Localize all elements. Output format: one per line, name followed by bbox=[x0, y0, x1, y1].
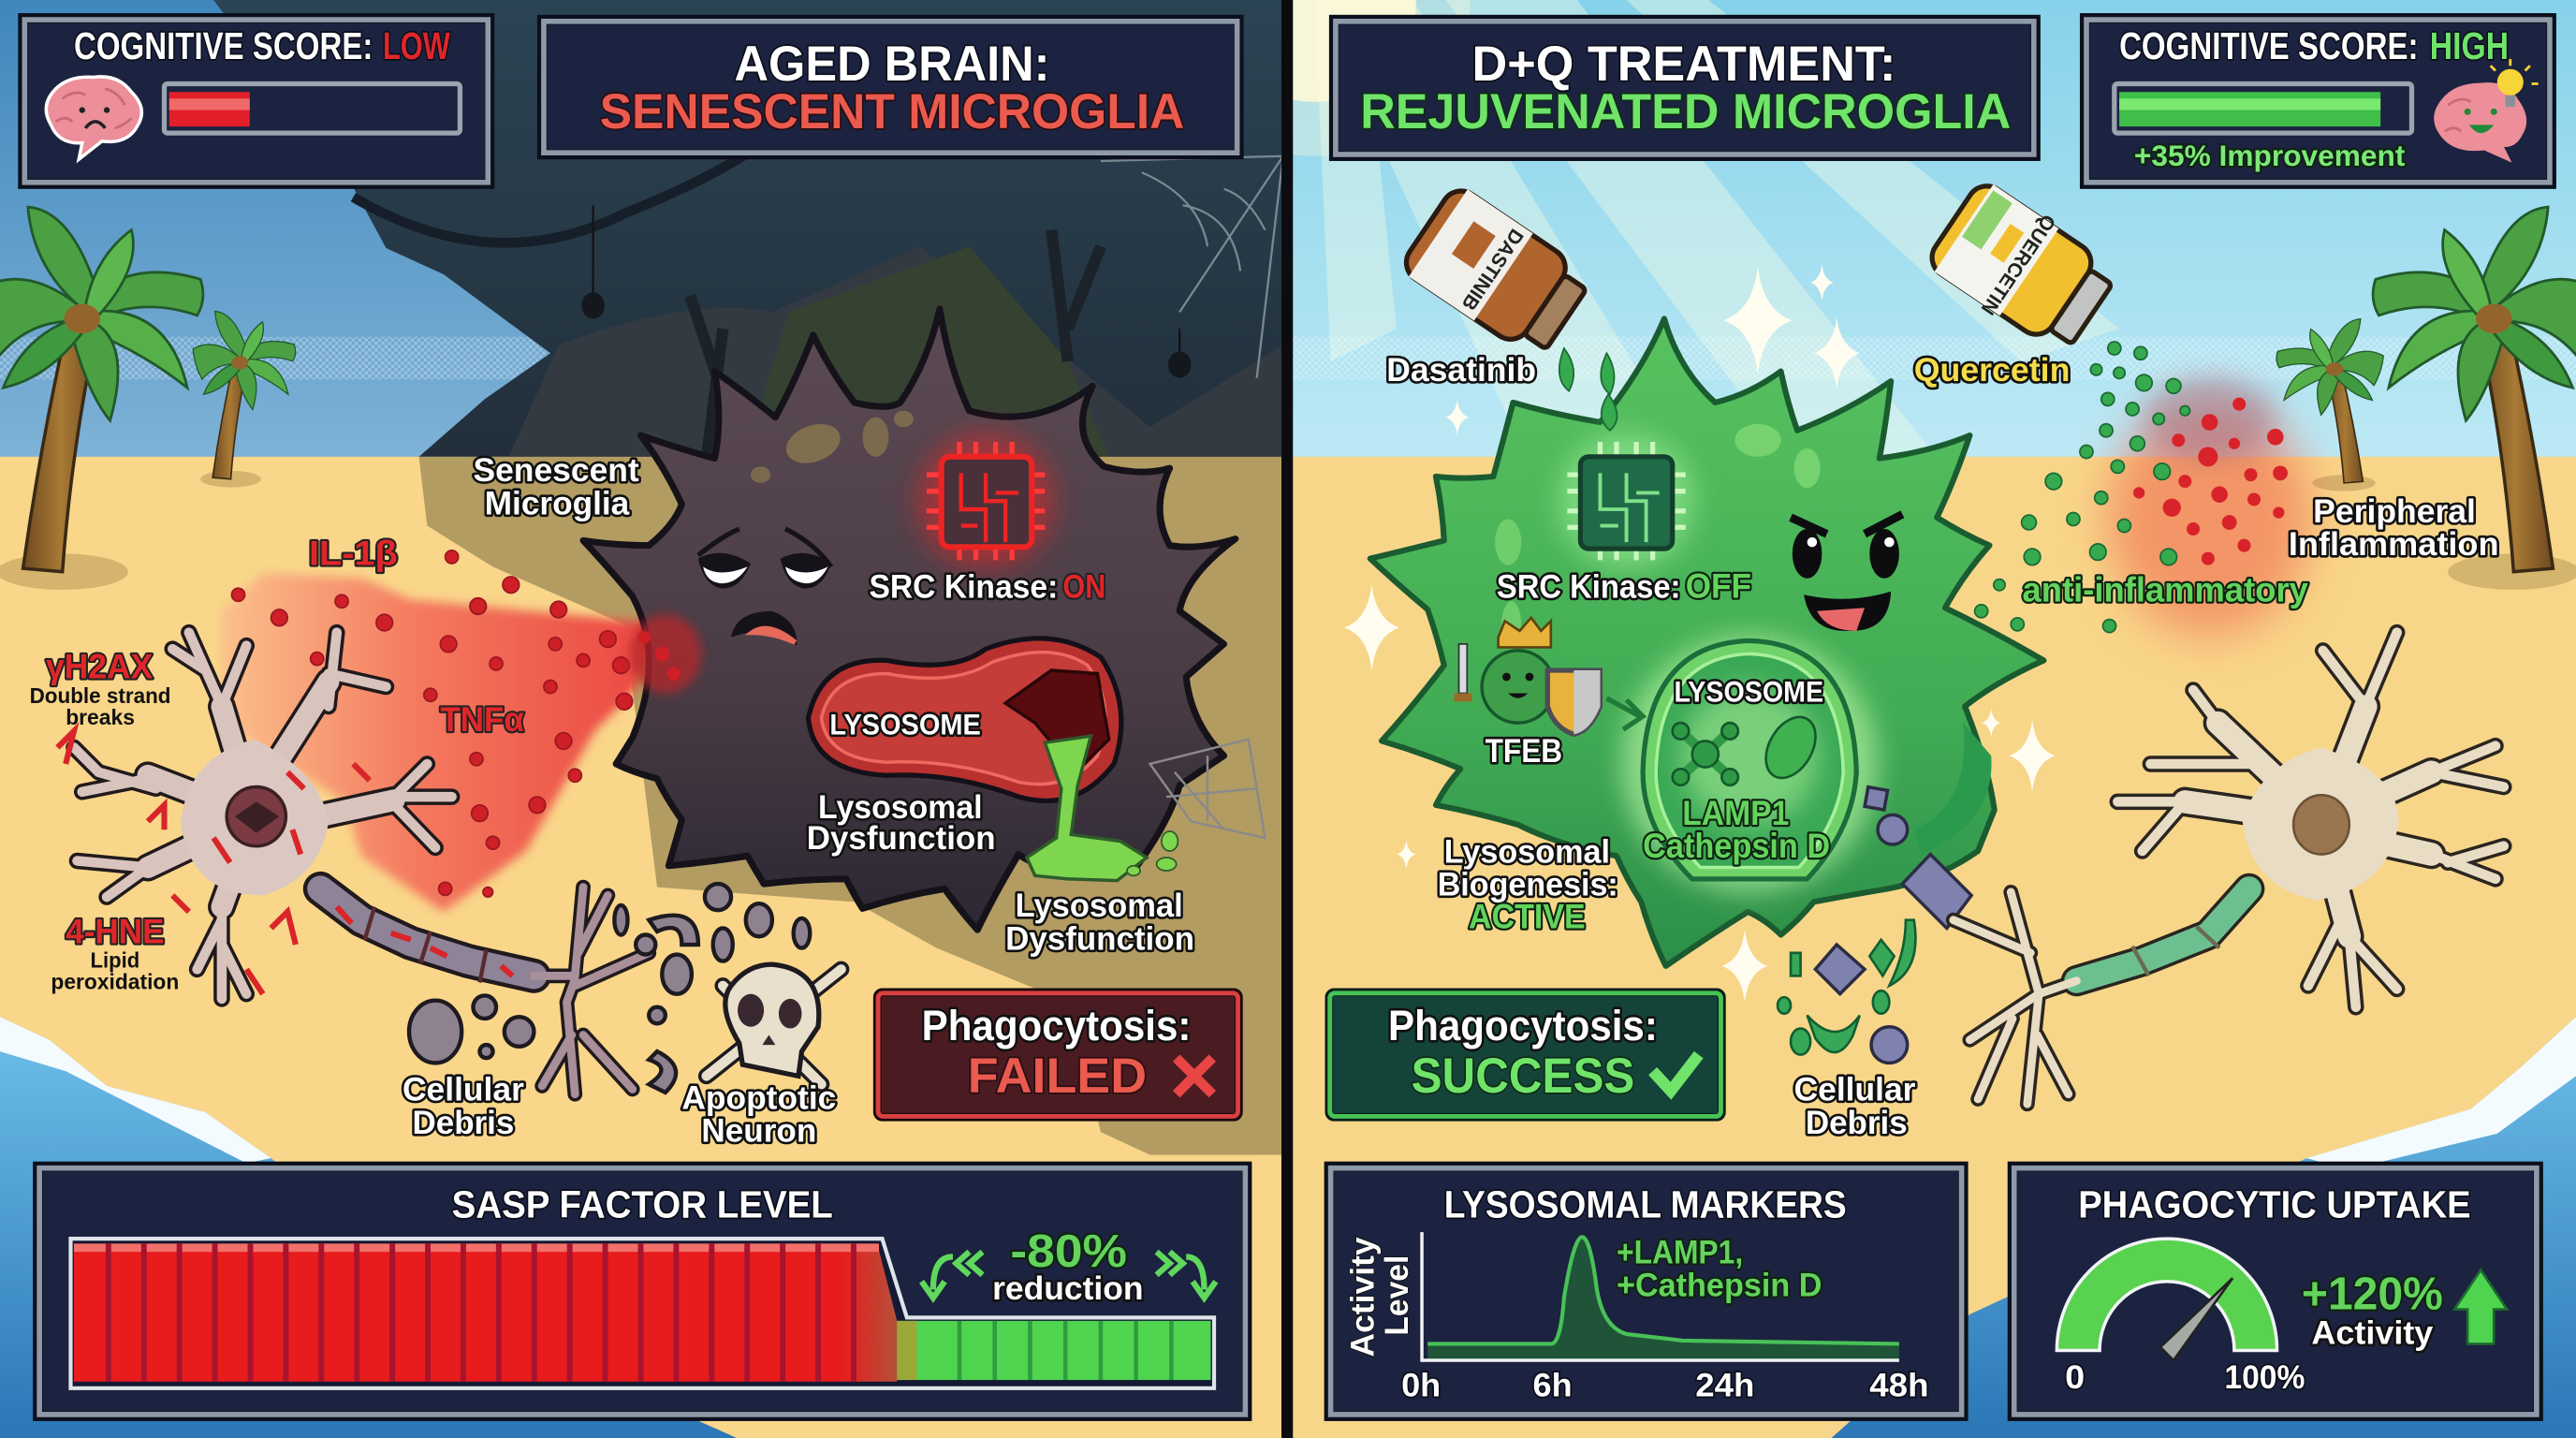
score bar high bbox=[2115, 83, 2411, 133]
label: apoptotic neuron: Apoptotic bbox=[681, 1080, 836, 1117]
palm tree big left bbox=[0, 207, 203, 590]
label: 4-HNE: Lipid bbox=[91, 948, 139, 973]
palm tree small left bbox=[193, 312, 296, 488]
glowing lysosome bbox=[1621, 636, 1878, 892]
improvement text: +35% Improvement bbox=[2134, 139, 2406, 172]
label: cellular debris left: Cellular bbox=[402, 1072, 524, 1108]
icon: red X bbox=[1177, 1058, 1212, 1094]
panel: phagocytosis failed: FAILED bbox=[968, 1049, 1147, 1104]
panel: lysosomal markers bbox=[1329, 1167, 1963, 1416]
panel: phagocytosis success: Phagocytosis: bbox=[1388, 1002, 1658, 1049]
title: D+Q treatment: REJUVENATED MICROGLIA bbox=[1360, 84, 2011, 139]
cave rock backdrop bbox=[213, 0, 1283, 457]
label: lysosomal dysfunction inner: Dysfunction bbox=[807, 820, 996, 857]
dasatinib bottle bbox=[1398, 182, 1617, 431]
right scene background bbox=[1158, 0, 2576, 1438]
label: 4-HNE: 4-HNE bbox=[66, 912, 165, 950]
sparkles bbox=[1344, 265, 2056, 1002]
label: lysosomal biogenesis active: Lysosomal bbox=[1444, 833, 1610, 870]
panel: phagocytosis failed: Phagocytosis: bbox=[922, 1002, 1191, 1049]
icon: sad brain bbox=[46, 77, 141, 159]
TFEB knight bbox=[1454, 618, 1643, 734]
gauge: 0 bbox=[2065, 1359, 2085, 1396]
heading: COGNITIVE SCORE: bbox=[2119, 24, 2419, 67]
line chart: Activity bbox=[1344, 1237, 1381, 1357]
line chart: 6h bbox=[1533, 1368, 1573, 1404]
label: TFEB: TFEB bbox=[1486, 733, 1562, 770]
label: lysosomal dysfunction outer: Lysosomal bbox=[1016, 888, 1183, 924]
label: LAMP1 and cathepsin D bbox=[1643, 794, 1830, 865]
panel: cognitive score low bbox=[23, 18, 490, 184]
uptake value: +120% bbox=[2302, 1269, 2443, 1320]
palm tree big right bbox=[2373, 207, 2576, 590]
uptake value bbox=[2302, 1269, 2443, 1351]
panel: SASP factor level: SASP FACTOR LEVEL bbox=[452, 1182, 833, 1225]
anti-inflammatory particles bbox=[1975, 342, 2190, 633]
panel: phagocytosis success bbox=[1329, 992, 1721, 1117]
label: LAMP1 and cathepsin D: LAMP1 bbox=[1682, 794, 1789, 832]
quercetin bottle bbox=[1921, 172, 2124, 362]
cellular debris left bbox=[409, 884, 810, 1093]
title: aged brain: SENESCENT MICROGLIA bbox=[600, 84, 1184, 139]
label: TNF alpha: TNFα bbox=[440, 700, 524, 739]
label: senescent microglia: Senescent bbox=[473, 452, 639, 489]
label: IL-1 beta: IL-1β bbox=[309, 535, 398, 573]
heading: HIGH bbox=[2430, 24, 2509, 67]
label: lysosome right: LYSOSOME bbox=[1674, 674, 1823, 708]
debris being cleared bbox=[1778, 723, 1992, 1063]
label: gamma H2AX bbox=[30, 648, 171, 729]
label: SRC kinase on: ON bbox=[1063, 569, 1105, 606]
label: lysosomal dysfunction inner: Lysosomal bbox=[818, 789, 983, 826]
peripheral inflammation cloud bbox=[2108, 378, 2311, 636]
label: anti-inflammatory: anti-inflammatory bbox=[2023, 570, 2308, 609]
green slime leak bbox=[1027, 736, 1178, 881]
line chart: Level bbox=[1379, 1255, 1415, 1336]
icon: happy brain with bulb bbox=[2433, 59, 2539, 164]
left labels bbox=[30, 452, 1194, 1150]
label: lysosomal dysfunction outer: Dysfunction bbox=[1005, 920, 1194, 957]
label: senescent microglia bbox=[473, 452, 639, 521]
healthy neuron bbox=[1954, 633, 2504, 1104]
reduction callout: -80% bbox=[1010, 1226, 1127, 1277]
title: D+Q treatment bbox=[1334, 20, 2036, 156]
palm tree small right bbox=[2276, 319, 2383, 492]
label: gamma H2AX: breaks bbox=[66, 705, 135, 729]
cobweb on cell bbox=[1150, 740, 1265, 838]
happy face bbox=[1791, 514, 1902, 631]
heading: LOW bbox=[383, 24, 451, 67]
label: LAMP1 and cathepsin D: Cathepsin D bbox=[1643, 827, 1830, 865]
gauge: 100% bbox=[2224, 1359, 2305, 1396]
water bbox=[0, 1017, 739, 1438]
panel: phagocytic uptake: PHAGOCYTIC UPTAKE bbox=[2078, 1182, 2471, 1225]
label: peripheral inflammation: Inflammation bbox=[2289, 526, 2499, 563]
line chart: +LAMP1, bbox=[1617, 1234, 1743, 1270]
label: lysosomal biogenesis active bbox=[1438, 833, 1618, 935]
line chart: +Cathepsin D bbox=[1617, 1268, 1822, 1304]
label: peripheral inflammation: Peripheral bbox=[2313, 493, 2476, 530]
label: 4-HNE bbox=[51, 912, 179, 993]
reduction callout: reduction bbox=[992, 1270, 1144, 1307]
label: SRC kinase off: OFF bbox=[1686, 567, 1751, 606]
line chart: 24h bbox=[1695, 1368, 1754, 1404]
line chart: 0h bbox=[1401, 1368, 1441, 1404]
sad face bbox=[698, 529, 831, 646]
label: cellular debris right: Debris bbox=[1806, 1105, 1908, 1141]
damaged lysosome bbox=[809, 638, 1121, 800]
center divider bbox=[1281, 0, 1293, 1438]
label: lysosomal biogenesis active: ACTIVE bbox=[1469, 897, 1586, 935]
damaged neuron bbox=[57, 633, 649, 1094]
label: peripheral inflammation bbox=[2289, 493, 2499, 563]
rejuvenated microglia cell bbox=[1370, 318, 2043, 966]
label: lysosomal dysfunction inner bbox=[807, 789, 996, 857]
label: quercetin: Quercetin bbox=[1914, 352, 2070, 389]
cytokine cloud bbox=[222, 550, 666, 912]
skull bbox=[707, 964, 842, 1084]
panel: phagocytosis success: SUCCESS bbox=[1412, 1049, 1634, 1104]
left scene background bbox=[0, 0, 1283, 1438]
label: apoptotic neuron bbox=[681, 1080, 836, 1150]
label: lysosomal dysfunction outer bbox=[1005, 888, 1194, 957]
SRC kinase chip active bbox=[916, 433, 1055, 570]
quercetin bottle: QUERCETIN bbox=[1977, 211, 2059, 318]
SRC kinase chip inactive bbox=[1558, 433, 1695, 570]
score bar low bbox=[165, 83, 460, 133]
gauge bbox=[2056, 1239, 2305, 1396]
label: senescent microglia: Microglia bbox=[485, 485, 630, 521]
reduction callout bbox=[922, 1226, 1216, 1307]
label: cellular debris left: Debris bbox=[413, 1105, 514, 1141]
senescent microglia cell bbox=[583, 309, 1265, 930]
label: gamma H2AX: Double strand bbox=[30, 683, 171, 708]
panel: lysosomal markers: LYSOSOMAL MARKERS bbox=[1444, 1182, 1847, 1225]
icon: check mark bbox=[1653, 1055, 1699, 1091]
title: aged brain: AGED BRAIN: bbox=[735, 37, 1050, 92]
label: cellular debris right: Cellular bbox=[1794, 1072, 1916, 1108]
dendrites and axon fill bbox=[74, 633, 649, 1094]
label: apoptotic neuron: Neuron bbox=[701, 1113, 816, 1150]
title: aged brain bbox=[542, 20, 1238, 154]
label: SRC kinase off: SRC Kinase: bbox=[1497, 569, 1680, 606]
dendrites and axon outline bbox=[74, 633, 649, 1094]
panel: cognitive score high bbox=[2085, 18, 2552, 184]
label: cellular debris right bbox=[1794, 1072, 1916, 1141]
title: D+Q treatment: D+Q TREATMENT: bbox=[1472, 37, 1895, 92]
label: 4-HNE: peroxidation bbox=[51, 969, 179, 993]
line chart bbox=[1344, 1232, 1928, 1404]
right labels bbox=[1386, 352, 2499, 1141]
panel: phagocytic uptake bbox=[2012, 1167, 2539, 1416]
dasatinib bottle: DASTINIB bbox=[1457, 225, 1528, 314]
cytokine puff at cell edge bbox=[629, 614, 701, 694]
label: lysosomal biogenesis active: Biogenesis: bbox=[1438, 866, 1618, 902]
heading: COGNITIVE SCORE: bbox=[74, 24, 373, 67]
label: SRC kinase on: SRC Kinase: bbox=[869, 569, 1058, 606]
label: gamma H2AX: γH2AX bbox=[46, 648, 154, 686]
icon: up arrow bbox=[2454, 1269, 2507, 1343]
panel: phagocytosis failed bbox=[877, 992, 1238, 1117]
panel: SASP factor level bbox=[37, 1167, 1247, 1416]
label: lysosome left: LYSOSOME bbox=[829, 707, 981, 741]
uptake value: Activity bbox=[2311, 1314, 2434, 1351]
sun and rays bbox=[1293, 0, 2119, 455]
label: cellular debris left bbox=[402, 1072, 524, 1141]
label: dasatinib: Dasatinib bbox=[1386, 352, 1536, 389]
cobweb bbox=[1101, 156, 1283, 378]
line chart: 48h bbox=[1869, 1368, 1928, 1404]
bar chart: SASP reduction bbox=[70, 1239, 1214, 1388]
